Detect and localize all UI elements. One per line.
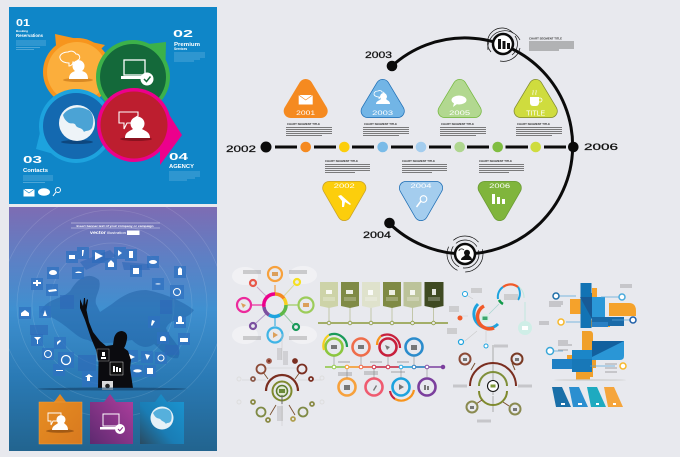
node: bar chart xyxy=(487,28,520,61)
chart: blue orange blocks bottom xyxy=(546,331,626,381)
person silhouette xyxy=(80,298,133,388)
text: 02 Premium: Premium xyxy=(174,42,200,48)
card: orange xyxy=(39,394,82,444)
segment text blocks: CHART SEGMENT TITLE xyxy=(529,36,562,40)
heading text: illustration xyxy=(107,231,126,235)
circle: orange xyxy=(43,34,111,106)
heading text: vector xyxy=(90,230,106,235)
chart: olive banners xyxy=(318,282,448,325)
card: blue xyxy=(140,394,184,444)
text: 03 Contacts: Contacts xyxy=(23,168,48,174)
segment text blocks: CHART SEGMENT TITLE xyxy=(479,159,512,163)
heading text: Insert banner text of your company or campaign xyxy=(76,224,154,228)
panel: four circles infographic xyxy=(9,7,217,204)
year labels: 2004 xyxy=(363,230,391,241)
segment text blocks: CHART SEGMENT TITLE xyxy=(517,122,550,126)
floor shadow xyxy=(37,388,187,390)
card: purple xyxy=(90,394,133,444)
triangle: 2003: 2003 xyxy=(372,110,394,117)
triangle: title xyxy=(521,86,551,118)
tile icons over silhouette xyxy=(97,349,123,390)
triangle: title: TITLE xyxy=(526,108,545,118)
triangle: 2002 xyxy=(329,183,359,214)
heading text xyxy=(71,223,160,235)
icon tiles xyxy=(19,247,190,387)
text: 04 Agency: AGENCY xyxy=(169,164,194,170)
circle: magenta xyxy=(97,88,182,165)
triangle: 2002: 2002 xyxy=(334,183,355,190)
circle: green xyxy=(96,40,170,114)
triangle: 2001: 2001 xyxy=(296,110,316,117)
triangle: 2005: 2005 xyxy=(449,110,471,117)
segment text blocks xyxy=(286,36,574,172)
circle: blue globe xyxy=(36,89,113,163)
chart: colour wheel xyxy=(232,266,317,344)
text: 01 Reservations: 01 xyxy=(16,18,31,29)
year labels xyxy=(226,50,618,241)
year labels: 2006 xyxy=(584,142,618,153)
text: 01 Reservations: Reservations xyxy=(16,33,44,38)
triangle: 2006 xyxy=(485,183,515,214)
chart: multicolour node timeline xyxy=(323,334,445,401)
text: 02 Premium xyxy=(173,29,205,61)
text: 03 Contacts xyxy=(23,155,53,182)
triangle: 2005 xyxy=(445,86,475,117)
node: person xyxy=(447,236,483,272)
year labels: 2002 xyxy=(226,144,256,155)
chart: brown radial right xyxy=(453,345,532,421)
text: 02 Premium: 02 xyxy=(173,29,194,40)
timeline dashes xyxy=(275,146,566,148)
chart: brown radial left xyxy=(237,334,324,426)
segment text blocks: CHART SEGMENT TITLE xyxy=(402,159,435,163)
segment text blocks: CHART SEGMENT TITLE xyxy=(364,122,397,126)
chart: four slanted bars xyxy=(552,387,623,407)
segment text blocks: CHART SEGMENT TITLE xyxy=(441,122,474,126)
chart: blue orange blocks top xyxy=(539,283,636,328)
node dots xyxy=(260,61,579,228)
triangle: 2004: 2004 xyxy=(410,183,432,190)
triangle: 2003 xyxy=(368,86,398,117)
text: 04 Agency xyxy=(169,152,200,180)
text: 02 Premium: Services xyxy=(174,47,187,51)
timeline chart xyxy=(226,28,618,272)
text: 04 Agency: 04 xyxy=(169,152,189,163)
text: 01 Reservations: Booking xyxy=(16,29,28,33)
year labels: 2003 xyxy=(365,50,392,61)
triangle: 2006: 2006 xyxy=(489,183,511,190)
text: 03 Contacts: 03 xyxy=(23,155,43,166)
triangle: 2001 xyxy=(291,86,321,117)
panel: silhouette with icons xyxy=(9,207,217,451)
triangle: 2004 xyxy=(406,183,436,214)
segment text blocks: CHART SEGMENT TITLE xyxy=(287,122,320,126)
icons: mail, chat, search xyxy=(24,188,60,196)
chart: blue and orange donuts xyxy=(447,284,532,348)
world map xyxy=(40,276,194,358)
segment text blocks: CHART SEGMENT TITLE xyxy=(325,159,358,163)
text: 01 Reservations xyxy=(16,18,46,50)
arc with nodes xyxy=(389,38,573,254)
